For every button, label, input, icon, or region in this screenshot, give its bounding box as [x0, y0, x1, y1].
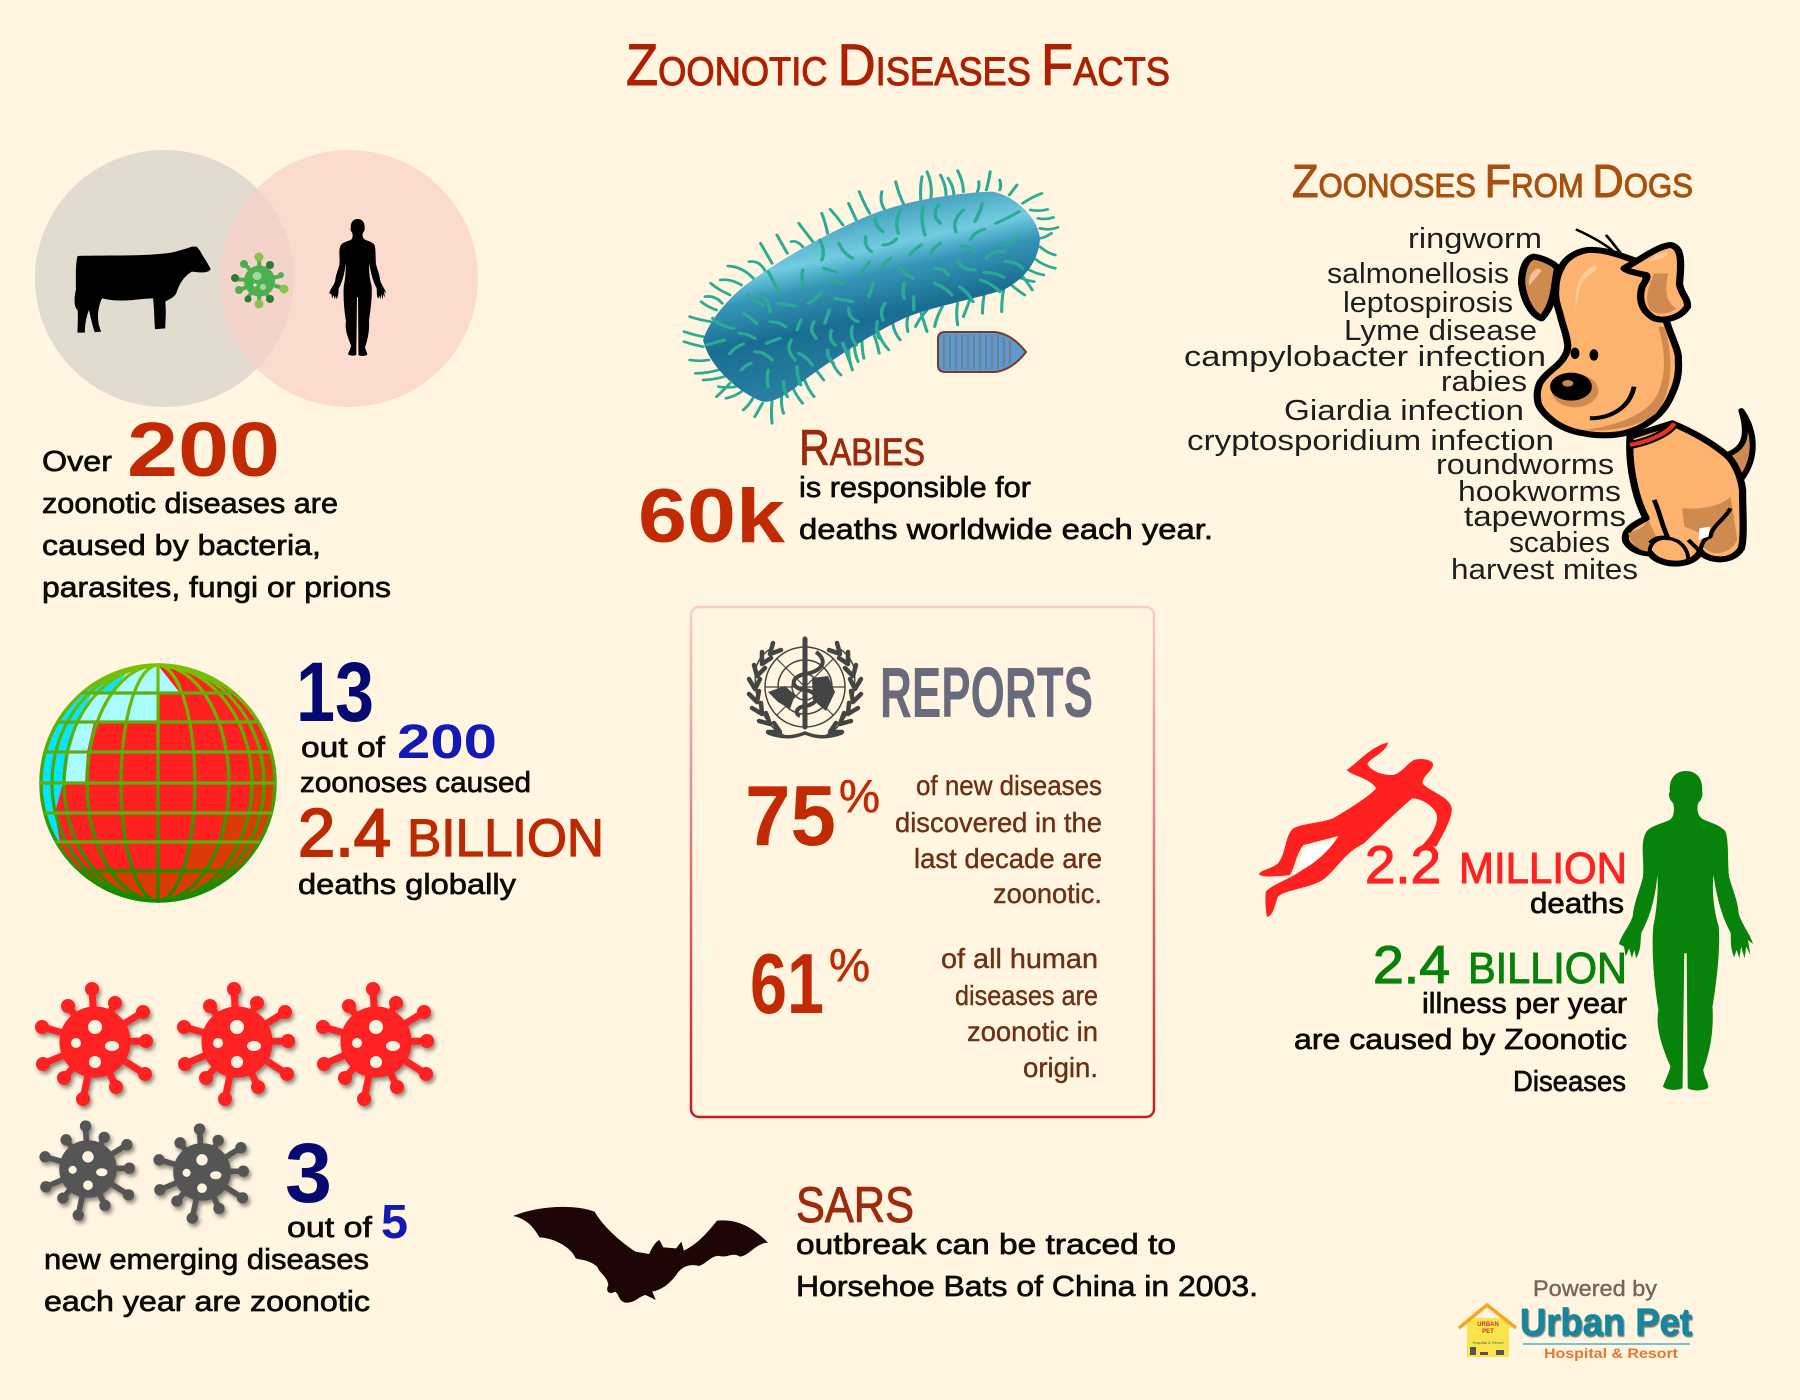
text: 3 out of 5: out of	[287, 1212, 373, 1244]
panel: deaths and illness	[1259, 742, 1753, 1098]
list: dog zoonoses: salmonellosis	[1327, 258, 1509, 290]
divider line	[1523, 1343, 1690, 1345]
list: dog zoonoses: rabies	[1441, 366, 1527, 398]
text: 13 out of 200 zoonoses caused 2.4 billion deaths: zoonoses caused	[300, 767, 531, 799]
icon: bacterium with spikes	[684, 171, 1058, 423]
icon: human silhouette	[329, 219, 386, 356]
panel: sars	[513, 1177, 1258, 1303]
icon: fallen red figure	[1259, 742, 1452, 917]
text: over 200: 200	[127, 407, 280, 493]
icon: WHO emblem	[749, 639, 861, 738]
text: 75 percent description: zoonotic.	[993, 878, 1102, 909]
text: 13 out of 200 zoonoses caused 2.4 billion deaths: out of	[301, 732, 386, 764]
text: 61 percent description: diseases are	[955, 980, 1098, 1011]
panel: powered by urban pet logo	[1459, 1276, 1692, 1361]
text: 61 percent description: zoonotic in	[967, 1016, 1098, 1047]
stat: 60k: 60k	[638, 474, 786, 559]
text: 75 percent description	[895, 770, 1102, 909]
text: over 200: parasites, fungi or prions	[42, 572, 391, 604]
stat: 2.4 billion illness	[1294, 936, 1627, 1098]
list: dog zoonoses: campylobacter infection	[1184, 341, 1546, 373]
stat: 2.2 million deaths: deaths	[1530, 888, 1624, 920]
icons: two grey viruses	[40, 1121, 249, 1223]
stat: 2.2 million deaths	[1365, 836, 1627, 920]
text: urban pet: Urban Pet	[1520, 1302, 1692, 1344]
list: dog zoonoses: tapeworms	[1464, 501, 1626, 533]
text: 13 out of 200 zoonoses caused 2.4 billion deaths: BILLION	[407, 809, 604, 868]
panel: zoonoses from dogs	[1184, 155, 1753, 586]
list: dog zoonoses	[1184, 223, 1638, 586]
list: dog zoonoses: roundworms	[1436, 449, 1614, 481]
stat: 75 percent: %	[839, 770, 880, 822]
title: ZOONOTIC DISEASES FACTS	[626, 33, 1170, 98]
stat: 61 percent: %	[829, 939, 870, 991]
text: hospital and resort: Hospital & Resort	[1544, 1345, 1678, 1361]
list: dog zoonoses: Giardia infection	[1284, 395, 1524, 427]
icon: grid globe	[39, 663, 277, 903]
text: over 200	[42, 407, 391, 604]
panel: 3 out of 5 emerging diseases	[36, 982, 434, 1318]
stat: 2.4 billion illness: BILLION	[1468, 944, 1627, 993]
stat: 2.2 million deaths: 2.2	[1365, 836, 1441, 895]
text: 3 out of 5: 5	[381, 1196, 408, 1249]
text: 61 percent description: origin.	[1023, 1052, 1098, 1083]
text: over 200: Over	[42, 446, 112, 478]
text: powered by: Powered by	[1533, 1276, 1657, 1301]
icon: bat	[513, 1207, 768, 1303]
icon: rabies virus bullet	[938, 332, 1026, 372]
box border	[691, 607, 1154, 1117]
text: 3 out of 5: new emerging diseases	[44, 1244, 369, 1276]
list: dog zoonoses: Lyme disease	[1344, 315, 1537, 347]
text: 13 out of 200 zoonoses caused 2.4 billion deaths	[296, 645, 604, 901]
list: dog zoonoses: leptospirosis	[1343, 287, 1513, 319]
text: 13 out of 200 zoonoses caused 2.4 billion deaths: 2.4	[298, 795, 391, 871]
stat: 61 percent: 61	[750, 937, 824, 1032]
text: rabies description	[799, 472, 1213, 546]
text: over 200: zoonotic diseases are	[42, 488, 338, 520]
text: 3 out of 5: each year are zoonotic	[44, 1286, 370, 1318]
panel: 13 out of 200	[39, 662, 600, 903]
icon: house logo	[1459, 1305, 1516, 1357]
heading: sars: SARS	[796, 1177, 914, 1233]
text: 13 out of 200 zoonoses caused 2.4 billion deaths: deaths globally	[298, 869, 517, 901]
text: 61 percent description: of all human	[941, 943, 1098, 974]
venn diagram: animal and human	[35, 150, 478, 407]
heading: rabies: RABIES	[799, 420, 925, 476]
stat: 75 percent: 75	[745, 769, 836, 864]
text: 13 out of 200 zoonoses caused 2.4 billion deaths: 13	[296, 645, 374, 739]
list: dog zoonoses: scabies	[1509, 527, 1610, 559]
panel: rabies	[638, 171, 1213, 559]
panel: over 200 zoonotic diseases	[35, 150, 478, 604]
stat: 2.2 million deaths: MILLION	[1459, 844, 1627, 893]
icon: green virus	[231, 252, 288, 308]
stat: 2.4 billion illness: 2.4	[1373, 936, 1450, 995]
text: rabies description: is responsible for	[799, 472, 1031, 504]
text: 13 out of 200 zoonoses caused 2.4 billion deaths: 200	[397, 716, 497, 769]
icon: green human silhouette	[1619, 771, 1753, 1090]
text: sars description: outbreak can be traced to	[796, 1229, 1176, 1261]
stat: 2.4 billion illness: Diseases	[1513, 1066, 1626, 1098]
text: 3 out of 5: 3	[285, 1126, 332, 1220]
icon: cartoon dog	[1522, 229, 1753, 564]
list: dog zoonoses: harvest mites	[1451, 554, 1638, 586]
text: 75 percent description: of new diseases	[916, 770, 1102, 801]
panel: who reports	[691, 607, 1154, 1117]
stat: 2.4 billion illness: are caused by Zoonotic	[1294, 1024, 1627, 1056]
icons: three red viruses	[36, 982, 434, 1106]
icon: cow	[75, 247, 211, 333]
list: dog zoonoses: ringworm	[1408, 223, 1542, 255]
text: 3 out of 5	[44, 1126, 408, 1318]
list: dog zoonoses: cryptosporidium infection	[1187, 425, 1554, 457]
text: over 200: caused by bacteria,	[42, 530, 321, 562]
stat: 2.4 billion illness: illness per year	[1422, 988, 1627, 1020]
text: 75 percent description: discovered in the	[895, 807, 1102, 838]
text: sars description: Horsehoe Bats of China in 2003.	[796, 1271, 1258, 1303]
text: sars description	[796, 1229, 1258, 1303]
icon: house logo: Hospital & Resort	[1472, 1340, 1504, 1345]
heading: zoonoses from dogs: ZOONOSES FROM DOGS	[1292, 155, 1693, 207]
text: 75 percent description: last decade are	[914, 843, 1102, 874]
heading: reports: REPORTS	[880, 654, 1093, 733]
list: dog zoonoses: hookworms	[1458, 476, 1621, 508]
icon: house logo: PET	[1482, 1329, 1494, 1335]
text: rabies description: deaths worldwide each year.	[799, 514, 1213, 546]
text: 61 percent description	[941, 943, 1098, 1083]
icon: house logo: URBAN	[1477, 1322, 1499, 1328]
